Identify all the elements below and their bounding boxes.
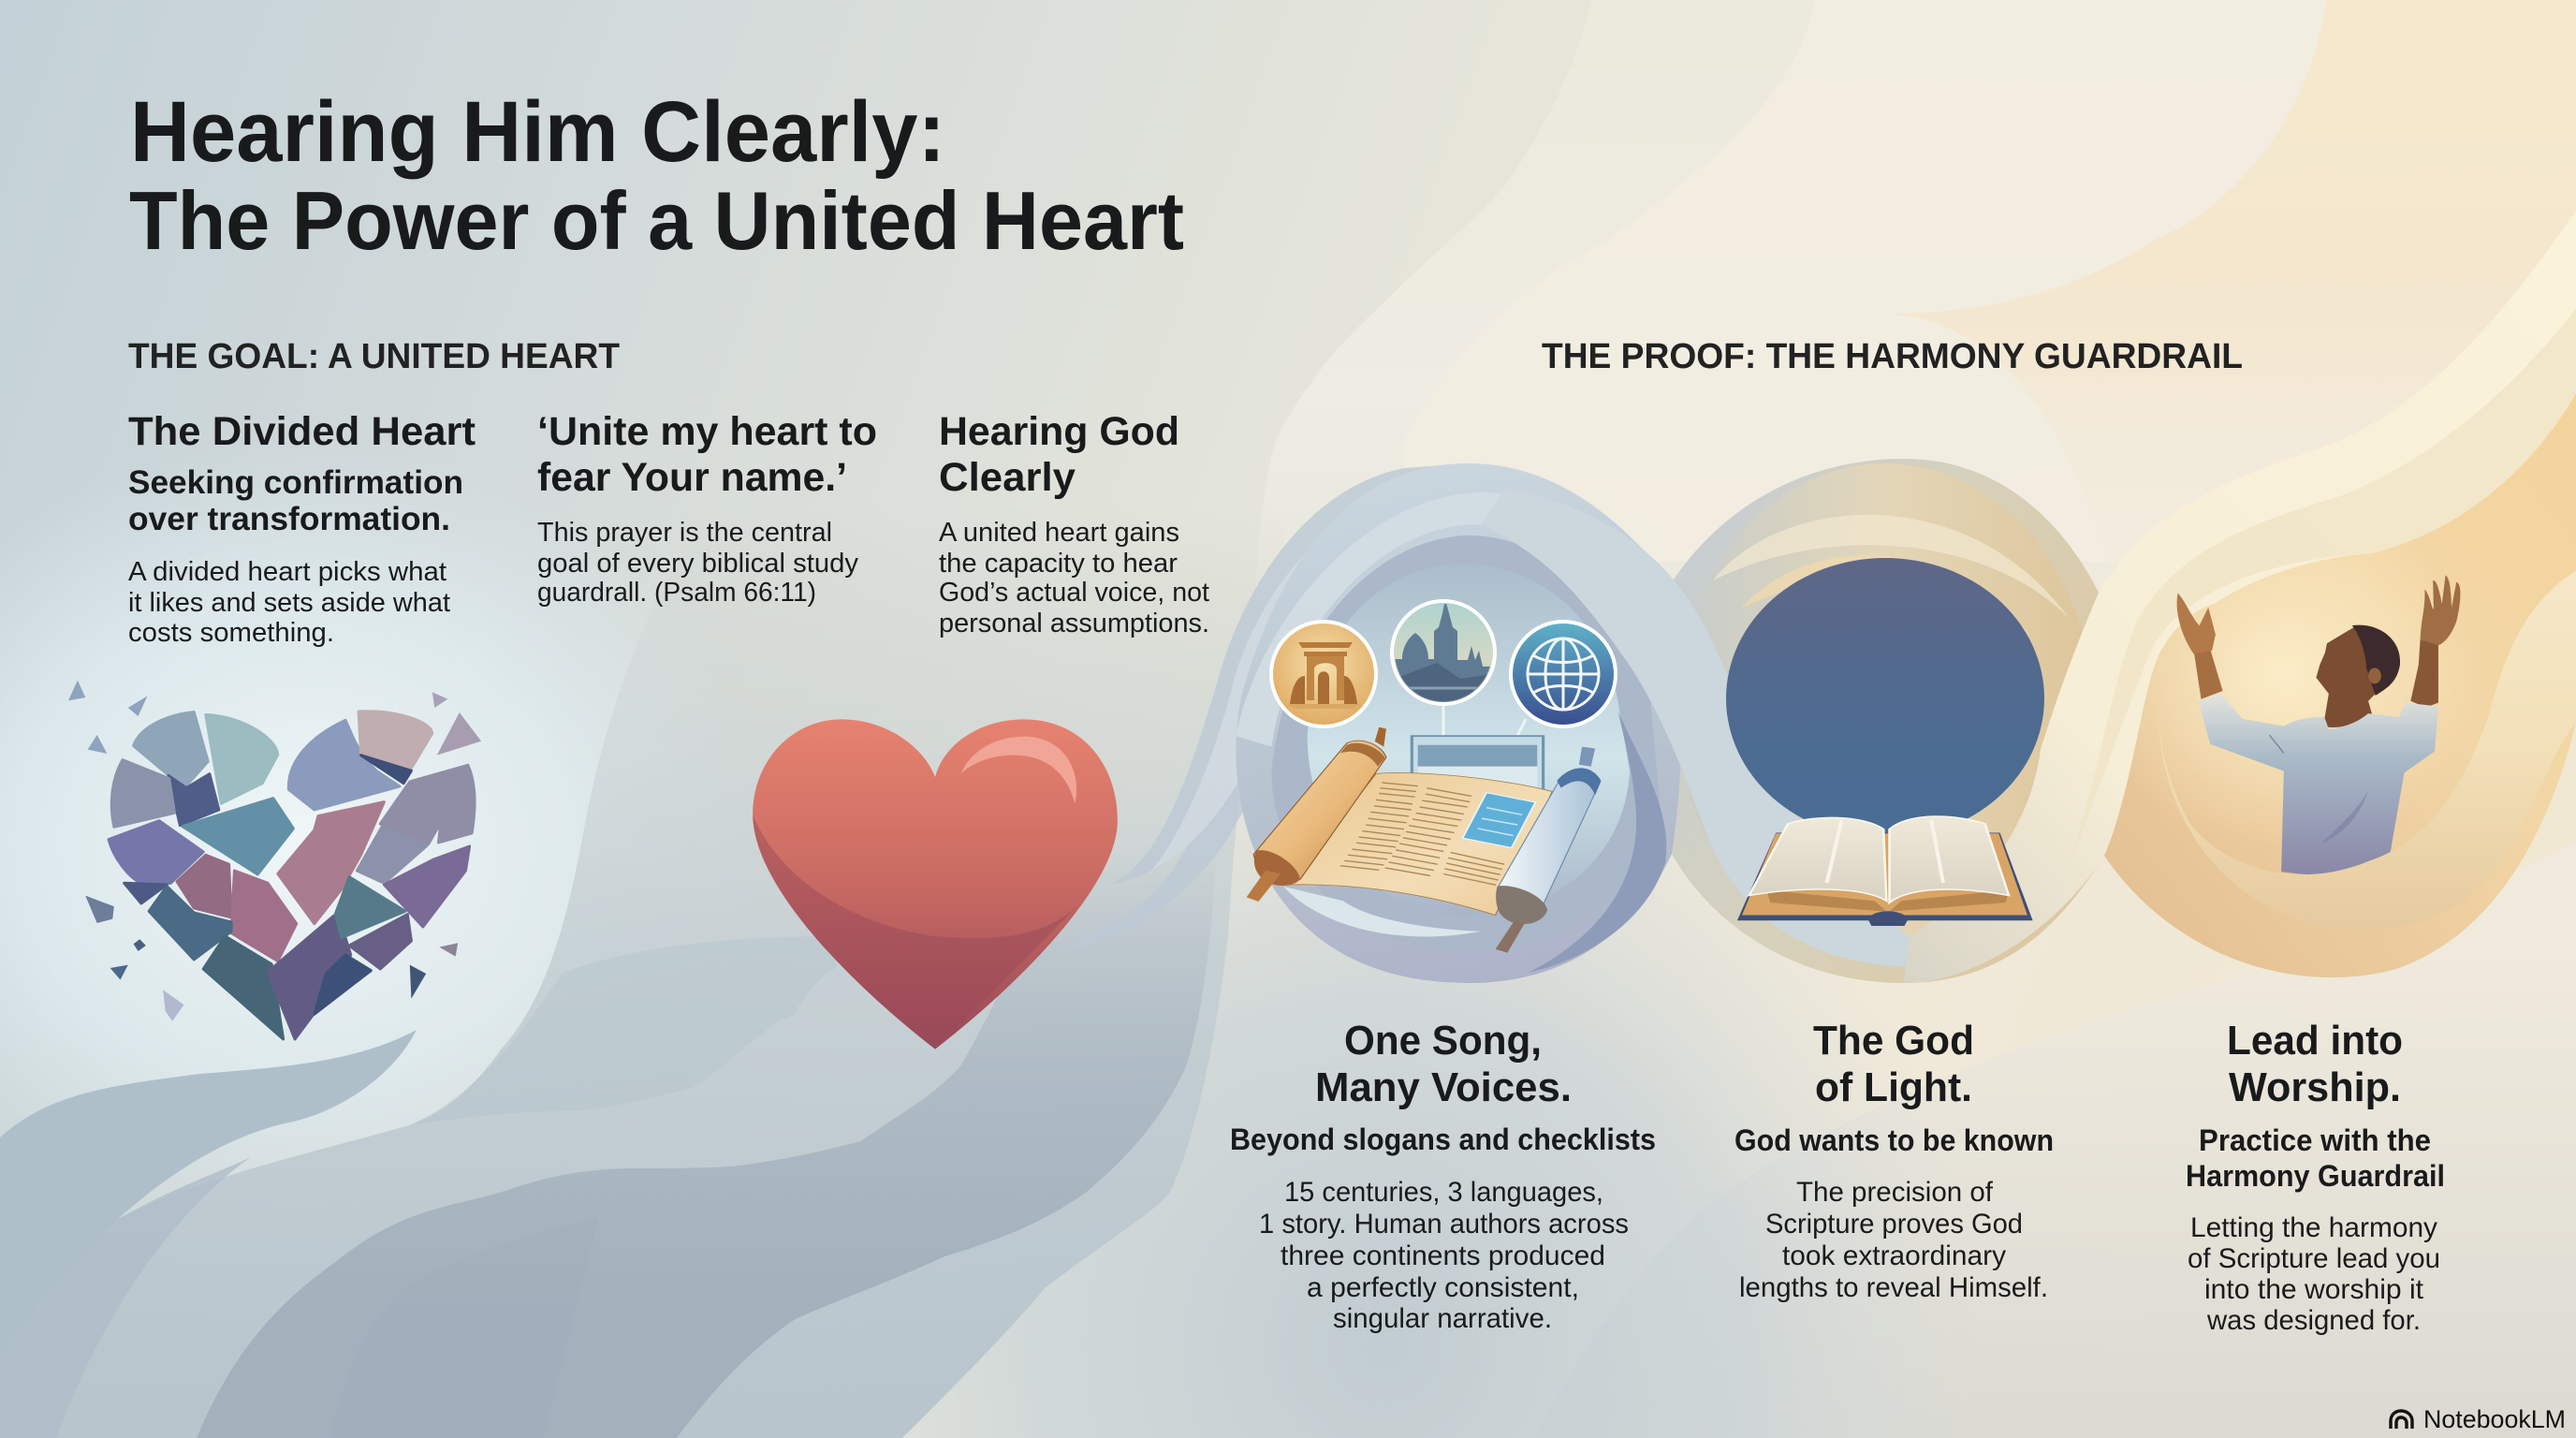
panel: hearing god clearly text: [939, 409, 1209, 638]
icon: united heart: [753, 719, 1118, 1049]
panel: hearing god clearly text: God’s actual voice, not: [939, 578, 1209, 608]
section heading: the goal: THE GOAL: A UNITED HEART: [128, 337, 620, 376]
panel: the god of light text: The God: [1813, 1018, 1974, 1064]
NotebookLM logo and wordmark: NotebookLM: [2423, 1405, 2566, 1433]
panel: the god of light text: Scripture proves God: [1765, 1209, 2023, 1240]
crossing ribbon: [1481, 489, 1946, 967]
connector lines: [1443, 706, 1526, 749]
icon: globe medallion: [1509, 620, 1617, 728]
panel: lead into worship text: into the worship it: [2204, 1274, 2424, 1305]
icon: gold ribbon bowl: [2097, 374, 2576, 977]
panel: the divided heart text: A divided heart picks what: [128, 557, 446, 587]
panel: unite my heart text: fear Your name.’: [537, 455, 847, 500]
panel: flowing circles illustration: [1236, 459, 2104, 983]
ribbon silhouette of circle one: [1236, 463, 1681, 983]
panel: the god of light text: The precision of: [1796, 1177, 1994, 1208]
panel: hearing god clearly text: Hearing God: [939, 409, 1179, 454]
title: [129, 84, 1184, 267]
title: Hearing Him Clearly:: [130, 84, 945, 180]
wisps connecting heart to first circle: [1060, 463, 1469, 952]
icon: open bible: [1737, 816, 2033, 926]
panel: one song many voices text: 1 story. Human authors across: [1259, 1209, 1629, 1240]
panel: the divided heart text: [128, 409, 476, 648]
ribbon silhouette of circle two: [1672, 459, 2104, 983]
section heading: the proof: THE PROOF: THE HARMONY GUARDRAIL: [1542, 337, 2243, 376]
panel: lead into worship text: Practice with the: [2199, 1123, 2431, 1157]
panel: the divided heart text: The Divided Heart: [128, 409, 476, 454]
icon: broken heart: [68, 681, 481, 1039]
panel: the god of light text: God wants to be known: [1734, 1123, 2054, 1157]
panel: the god of light text: lengths to reveal Himself.: [1739, 1272, 2048, 1303]
panel: hearing god clearly text: A united heart gains: [939, 518, 1179, 548]
dark blue circle of light: [1726, 558, 2044, 839]
panel: lead into worship text: Letting the harmony: [2190, 1212, 2437, 1243]
panel: one song many voices text: Many Voices.: [1315, 1064, 1572, 1110]
panel: hearing god clearly text: Clearly: [939, 455, 1076, 500]
panel: lead into worship text: of Scripture lead you: [2188, 1243, 2440, 1274]
icon: cream ribbon: [1904, 211, 2576, 983]
panel: one song many voices text: 15 centuries, 3 languages,: [1284, 1177, 1603, 1208]
panel: one song many voices text: a perfectly consistent,: [1307, 1272, 1579, 1303]
panel: unite my heart text: [537, 409, 877, 608]
panel: the god of light text: [1734, 1018, 2054, 1303]
panel: the divided heart text: costs something.: [128, 618, 334, 648]
icon: lower cream ribbon: [2158, 571, 2576, 930]
panel: hearing god clearly text: personal assumptions.: [939, 609, 1209, 638]
icon: worshipper with raised hands: [2177, 575, 2460, 874]
panel: unite my heart text: guardrall. (Psalm 66:11): [537, 578, 816, 608]
panel: one song many voices text: [1230, 1018, 1656, 1334]
title: The Power of a United Heart: [129, 174, 1184, 267]
panel: one song many voices text: One Song,: [1344, 1018, 1542, 1064]
panel: lead into worship text: was designed for.: [2206, 1305, 2421, 1336]
panel: lead into worship text: [2186, 1018, 2445, 1336]
panel: lead into worship text: Worship.: [2229, 1064, 2401, 1110]
panel: unite my heart text: ‘Unite my heart to: [537, 409, 877, 454]
panel: hearing god clearly text: the capacity to hear: [939, 549, 1178, 579]
panel: the god of light text: of Light.: [1815, 1064, 1972, 1110]
panel: one song many voices text: Beyond slogans and checklists: [1230, 1123, 1656, 1156]
panel: the divided heart text: Seeking confirmation: [128, 464, 463, 501]
panel: one song many voices text: three continents produced: [1281, 1240, 1605, 1271]
panel: lead into worship text: Lead into: [2227, 1018, 2403, 1064]
panel: the god of light text: took extraordinary: [1782, 1240, 2006, 1271]
icon: city skyline medallion: [1390, 599, 1497, 706]
panel: lead into worship text: Harmony Guardrail: [2186, 1159, 2445, 1193]
circle one inner rings: [1236, 492, 1695, 973]
icon: scroll with screen: [1247, 727, 1601, 953]
icon: ancient arch medallion: [1269, 620, 1378, 728]
panel: unite my heart text: This prayer is the central: [537, 518, 832, 548]
circle two inner rings: [1677, 463, 2093, 960]
panel: the divided heart text: it likes and sets aside what: [128, 588, 450, 618]
panel: the divided heart text: over transformation.: [128, 501, 450, 537]
panel: one song many voices text: singular narrative.: [1333, 1303, 1552, 1334]
panel: unite my heart text: goal of every biblical study: [537, 549, 858, 579]
